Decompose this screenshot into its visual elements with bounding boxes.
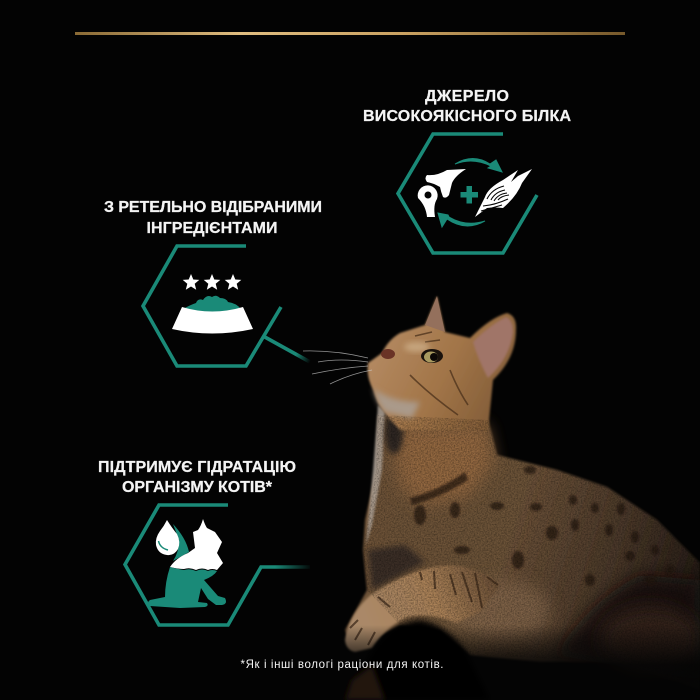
icon: hydrated cat xyxy=(148,519,226,608)
cat forehead highlight xyxy=(404,342,430,352)
cat lower haunch xyxy=(600,605,700,675)
cat grey neck shadow xyxy=(385,410,403,454)
bowl xyxy=(172,307,253,334)
icon: bottom arrow xyxy=(438,213,485,227)
heading: hydration: ПІДТРИМУЄ ГІДРАТАЦІЮ xyxy=(98,459,296,476)
hexagon frame: ingredients xyxy=(143,246,310,366)
hexagon stem xyxy=(468,253,471,310)
connector line xyxy=(263,336,310,362)
lower left glimpse xyxy=(345,665,385,700)
cat ears xyxy=(425,296,513,378)
heading: ingredients: З РЕТЕЛЬНО ВІДІБРАНИМИ xyxy=(104,199,322,216)
dark shape under the paw xyxy=(345,620,490,700)
heading: ingredients: ІНГРЕДІЄНТАМИ xyxy=(146,220,278,237)
gold top rule xyxy=(75,32,625,35)
icon: muscle xyxy=(475,169,532,217)
cat grey chest shadow xyxy=(368,545,425,590)
cat spots xyxy=(410,466,674,586)
fading line xyxy=(275,565,310,569)
hexagon frame: protein xyxy=(398,134,537,310)
lower fade xyxy=(340,620,700,700)
cat warm chest xyxy=(395,425,494,505)
drop highlight xyxy=(158,541,168,550)
cat photo xyxy=(303,296,700,700)
heading: ingredients xyxy=(104,199,322,237)
cat mid-body light xyxy=(450,580,550,640)
cat eye xyxy=(421,349,443,363)
cat face markings xyxy=(410,332,468,415)
cat cheek fur xyxy=(373,388,420,418)
heading: hydration: ОРГАНІЗМУ КОТІВ* xyxy=(122,479,273,496)
icon: top arrow xyxy=(455,158,502,172)
footnote: *Як і інші вологі раціони для котів. xyxy=(240,659,444,671)
cat fur texture xyxy=(363,415,700,690)
food xyxy=(183,296,241,312)
right ear inner xyxy=(473,317,513,378)
paw stripes xyxy=(350,571,498,645)
left ear xyxy=(425,296,445,332)
icon: bone, muscle and arrows xyxy=(418,158,532,227)
cat dark flank shadow xyxy=(555,575,700,680)
hexagon frame: hydration xyxy=(125,505,310,625)
cat lower teal xyxy=(148,567,226,608)
water drop xyxy=(156,520,179,555)
drop teal band xyxy=(173,524,189,561)
icon: bowl with stars xyxy=(172,274,253,334)
whiskers xyxy=(303,351,372,384)
icon: joint lower bone xyxy=(418,185,438,217)
cat body xyxy=(345,415,700,690)
cat nose xyxy=(381,349,395,359)
icon: joint upper bone xyxy=(426,169,466,198)
heading: protein source xyxy=(363,88,571,125)
icon: plus xyxy=(460,186,478,204)
cat head xyxy=(368,296,516,430)
heading: protein source: ВИСОКОЯКІСНОГО БІЛКА xyxy=(363,108,571,125)
cat foreleg and paw xyxy=(345,565,500,652)
cat upper white xyxy=(170,519,223,570)
stars xyxy=(183,274,241,290)
heading: protein source: ДЖЕРЕЛО xyxy=(425,88,509,105)
heading: hydration xyxy=(98,459,296,496)
cat pale chest edge xyxy=(366,405,385,545)
